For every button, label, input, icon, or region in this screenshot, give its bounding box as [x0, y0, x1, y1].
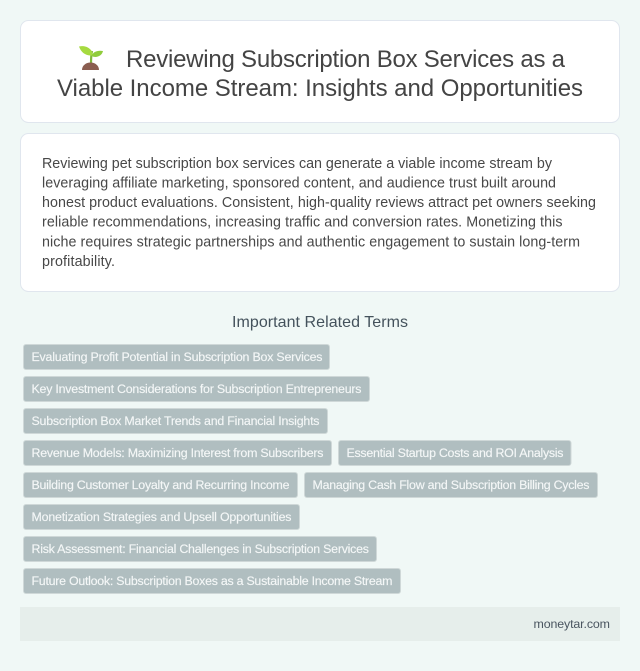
- tag: cash flow: Managing Cash Flow and Subscription Billing Cycles: [312, 478, 590, 492]
- text block: summary: leveraging affiliate marketing, sponsored content, and audience trust built around: [42, 176, 556, 192]
- tag: key investment considerations: Key Investment Considerations for Subscription Entrepreneurs: [32, 382, 362, 396]
- tag: customer loyalty: [24, 472, 298, 498]
- text block: summary: profitability.: [42, 254, 115, 270]
- tag: key investment considerations: [24, 376, 370, 402]
- tag: startup costs: Essential Startup Costs and ROI Analysis: [346, 446, 564, 460]
- tag: market trends: Subscription Box Market Trends and Financial Insights: [32, 414, 320, 428]
- footer: moneytar.com: [534, 617, 610, 631]
- tag: future outlook: Future Outlook: Subscription Boxes as a Sustainable Income Stream: [32, 574, 392, 588]
- tag: monetization strategies: [24, 504, 300, 530]
- title: [57, 46, 583, 102]
- text block: summary: niche requires strategic partnerships and authentic engagement to sustain long-term: [42, 234, 580, 250]
- text block: summary: reliable recommendations, increasing traffic and conversion rates. Monetizing this: [42, 214, 562, 230]
- tag: future outlook: [24, 568, 400, 594]
- title: Reviewing Subscription Box Services as a: [126, 46, 566, 73]
- tag: revenue models: Revenue Models: Maximizing Interest from Subscribers: [32, 446, 324, 460]
- tag: revenue models: [24, 440, 332, 466]
- panel: summary card: [20, 134, 620, 292]
- heading: related terms: Important Related Terms: [232, 314, 408, 331]
- text block: summary: honest product evaluations. Consistent, high-quality reviews attract pet owners seeking: [42, 195, 596, 211]
- tag: startup costs: [338, 440, 571, 466]
- panel: title card: [20, 20, 620, 122]
- text block: summary: Reviewing pet subscription box services can generate a viable income stream by: [42, 156, 553, 172]
- tag: cash flow: [304, 472, 598, 498]
- tag: customer loyalty: Building Customer Loyalty and Recurring Income: [32, 478, 290, 492]
- tag: evaluating profit potential: Evaluating Profit Potential in Subscription Box Services: [32, 350, 322, 364]
- tag: risk assessment: [24, 536, 376, 562]
- icon: sprout: [79, 46, 103, 70]
- title: Viable Income Stream: Insights and Opportunities: [57, 75, 583, 102]
- tag: monetization strategies: Monetization Strategies and Upsell Opportunities: [32, 510, 292, 524]
- footer: [20, 607, 620, 641]
- text block: summary: [42, 156, 596, 270]
- tag: risk assessment: Risk Assessment: Financial Challenges in Subscription Services: [32, 542, 369, 556]
- tag: evaluating profit potential: [24, 344, 330, 370]
- tag: market trends: [24, 408, 328, 434]
